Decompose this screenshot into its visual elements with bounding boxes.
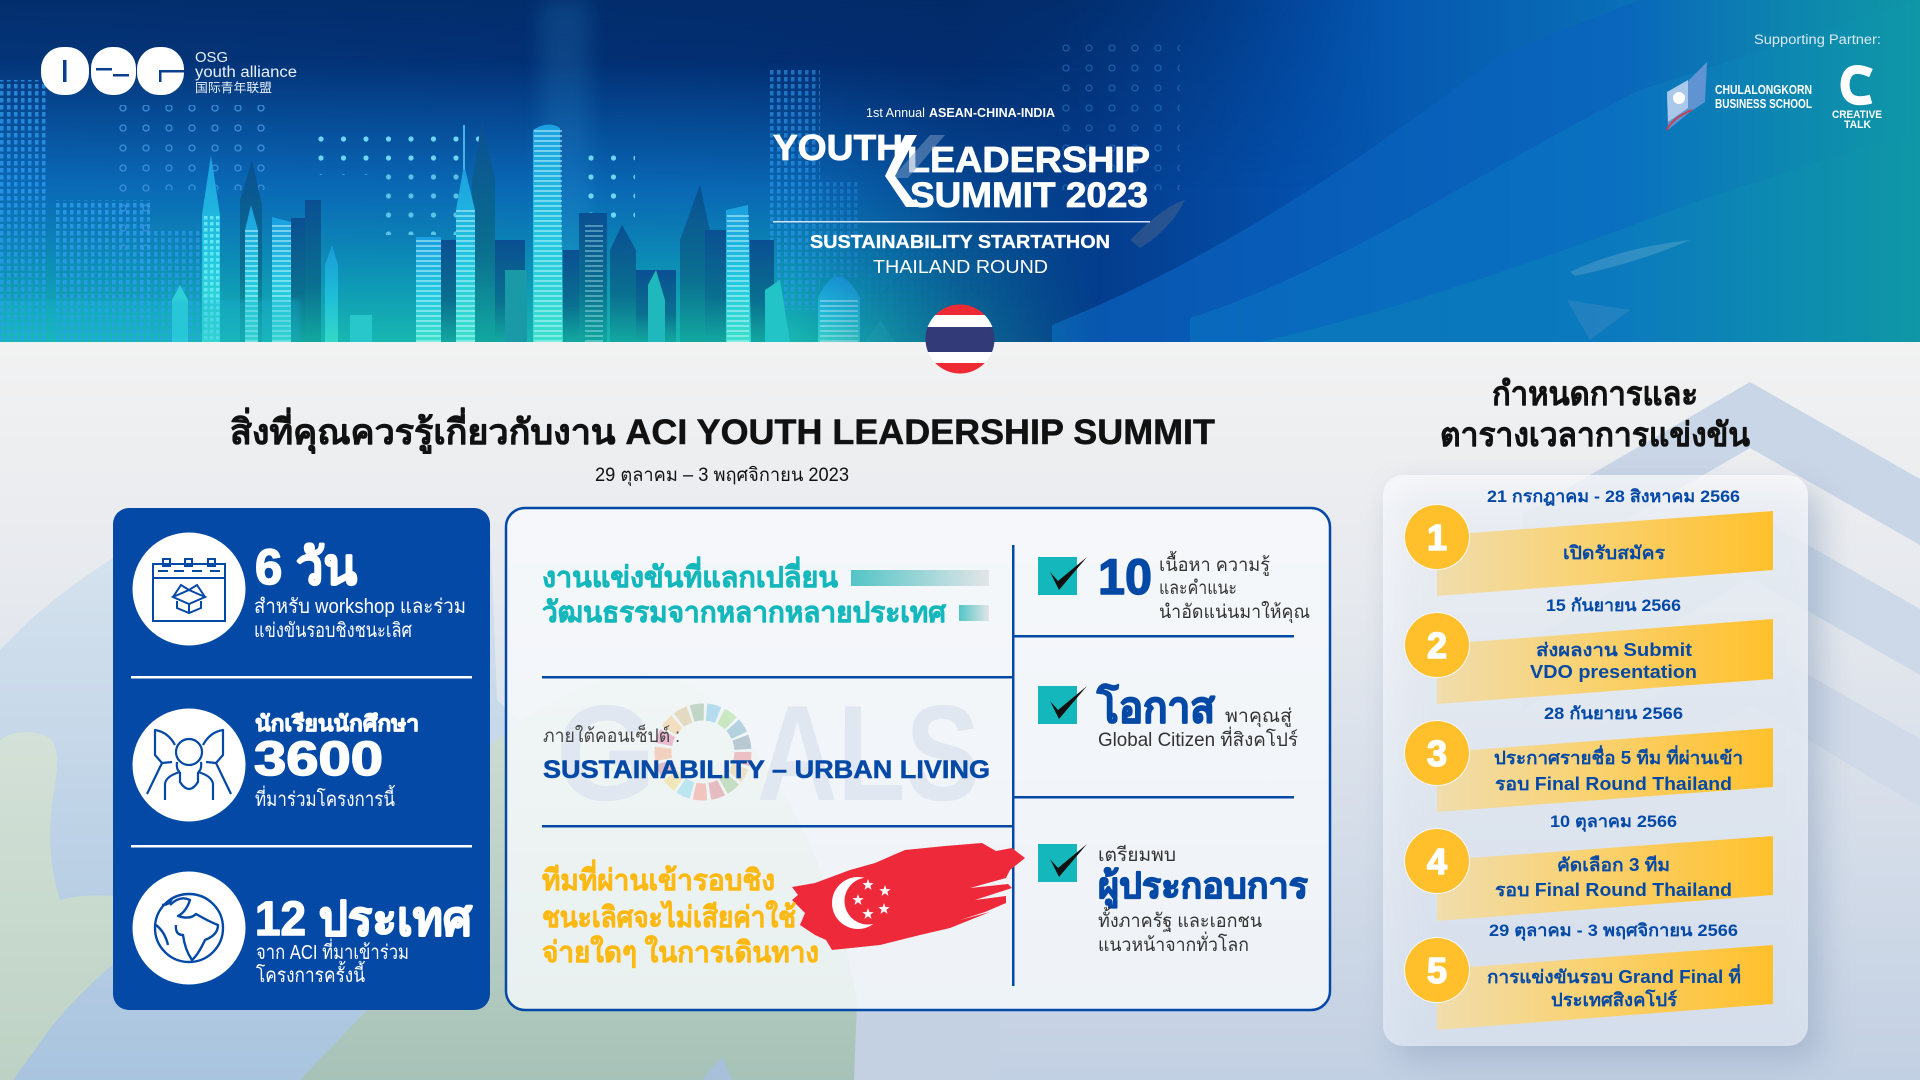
text: travel cost: ทีมที่ผ่านเข้ารอบชิง	[542, 859, 775, 897]
step 5: ประเทศสิงคโปร์	[1551, 989, 1677, 1010]
header banner	[0, 0, 1920, 342]
text: cultural exchange: วัฒนธรรมจากหลากหลายประเทศ	[542, 597, 947, 629]
step 4: 10 ตุลาคม 2566	[1550, 812, 1677, 832]
stat: 12 countries	[132, 872, 473, 987]
step 4	[1404, 812, 1773, 921]
step 5: การแข่งขันรอบ Grand Final ที่	[1487, 964, 1741, 987]
step 4: คัดเลือก 3 ทีม	[1557, 855, 1670, 875]
item: entrepreneurs: ผู้ประกอบการ	[1098, 865, 1309, 909]
logo: OSG youth alliance: youth alliance	[195, 64, 297, 81]
icon: Creative Talk C	[1845, 69, 1871, 101]
heading: schedule: กำหนดการและ	[1492, 375, 1698, 412]
partner logos: CHULALONGKORN	[1715, 83, 1812, 97]
partner logos: CREATIVE	[1832, 109, 1882, 121]
step 3: รอบ Final Round Thailand	[1495, 774, 1732, 794]
city skyline	[0, 0, 1100, 342]
step 4: 4	[1427, 841, 1447, 882]
text: concept	[543, 723, 990, 784]
stat: 3600 students: 3600	[254, 733, 383, 786]
stat: 3600 students: ที่มาร่วมโครงการนี้	[255, 785, 395, 811]
step 1: เปิดรับสมัคร	[1563, 543, 1665, 563]
item: entrepreneurs: ทั้งภาครัฐ และเอกชน	[1098, 907, 1262, 932]
item: entrepreneurs: แนวหน้าจากทั่วโลก	[1098, 931, 1249, 956]
heading: schedule: ตารางเวลาการแข่งขัน	[1440, 416, 1750, 453]
step 3: 3	[1427, 733, 1447, 774]
step 2	[1404, 596, 1773, 704]
logo: OSG youth alliance: OSG	[195, 49, 228, 66]
stat: 3600 students: นักเรียนนักศึกษา	[255, 711, 419, 736]
stat: 12 countries: โครงการครั้งนี้	[256, 961, 365, 987]
event title block: ASEAN-CHINA-INDIA	[929, 106, 1055, 120]
item: 10 topics	[1038, 549, 1310, 624]
step 2: ส่งผลงาน Submit	[1536, 640, 1692, 660]
step 5: 5	[1427, 950, 1447, 991]
stat: 6 days	[132, 532, 466, 646]
watermark: GOALS with SDG wheel: G	[556, 677, 656, 829]
item: 10 topics: นำอัดแน่นมาให้คุณ	[1159, 601, 1310, 624]
partner logos: BUSINESS SCHOOL	[1715, 97, 1812, 111]
main heading: 29 ตุลาคม – 3 พฤศจิกายน 2023	[595, 465, 849, 487]
logo: OSG youth alliance: 国际青年联盟	[195, 81, 272, 95]
text: travel cost: ชนะเลิศจะไม่เสียค่าใช้	[542, 900, 796, 934]
icon: Thai flag	[925, 304, 995, 375]
panel: highlights	[506, 508, 1330, 1010]
icon: OSG logo blobs	[41, 47, 184, 95]
text: cultural exchange	[542, 556, 989, 629]
main heading	[230, 407, 1215, 487]
step 3	[1404, 704, 1773, 812]
step 1: 21 กรกฎาคม - 28 สิงหาคม 2566	[1487, 487, 1740, 506]
item: opportunity: Global Citizen ที่สิงคโปร์	[1098, 726, 1298, 751]
icon: title chevron	[885, 135, 945, 207]
item: entrepreneurs: เตรียมพบ	[1098, 844, 1176, 866]
panel: key numbers	[113, 508, 490, 1010]
text: concept: SUSTAINABILITY – URBAN LIVING	[543, 756, 990, 784]
logo: OSG youth alliance	[41, 47, 297, 95]
icon: calendar with box	[153, 559, 225, 621]
icon: group of people	[147, 730, 231, 800]
step 4: รอบ Final Round Thailand	[1495, 880, 1732, 900]
icon: Singapore flag brush stroke	[792, 843, 1025, 950]
icon: globe	[155, 894, 223, 962]
event title block: THAILAND ROUND	[873, 257, 1048, 277]
item: 10 topics: 10	[1098, 549, 1152, 605]
step 3: ประกาศรายชื่อ 5 ทีม ที่ผ่านเข้า	[1494, 745, 1743, 768]
partner logos	[1667, 32, 1882, 131]
watermark: GOALS with SDG wheel	[556, 677, 980, 829]
step 2: VDO presentation	[1530, 662, 1697, 682]
watermark: GOALS with SDG wheel: ALS	[757, 677, 980, 829]
step 5: 29 ตุลาคม - 3 พฤศจิกายน 2566	[1489, 921, 1738, 941]
item: 10 topics: และคำแนะ	[1159, 578, 1237, 599]
step 1: 1	[1427, 517, 1447, 558]
text: cultural exchange: งานแข่งขันที่แลกเปลี่ยน	[542, 556, 838, 594]
stat: 12 countries: 12 ประเทศ	[255, 893, 473, 946]
panel: schedule timeline	[1383, 475, 1820, 1060]
step 3: 28 กันยายน 2566	[1544, 704, 1683, 723]
main heading: สิ่งที่คุณควรรู้เกี่ยวกับงาน ACI YOUTH LEADERSHIP SUMMIT	[230, 407, 1215, 454]
step 1	[1404, 487, 1773, 596]
text: concept: ภายใต้คอนเซ็ปต์ :	[543, 723, 680, 747]
event title block: YOUTH	[773, 127, 903, 168]
icon: Chulalongkorn shield	[1667, 62, 1707, 130]
stat: 6 days: สำหรับ workshop และร่วม	[254, 596, 466, 618]
step 5	[1404, 921, 1773, 1030]
item: opportunity: พาคุณสู่	[1225, 706, 1292, 728]
step 2: 15 กันยายน 2566	[1546, 596, 1681, 615]
text: travel cost	[542, 859, 819, 969]
heading: schedule	[1440, 375, 1750, 453]
event title block: SUMMIT 2023	[910, 176, 1148, 215]
stat: 3600 students	[132, 708, 419, 822]
event title block: 1st Annual	[866, 106, 925, 120]
event title block: LEADERSHIP	[907, 139, 1150, 180]
event title block: SUSTAINABILITY STARTATHON	[810, 232, 1110, 252]
item: 10 topics: เนื้อหา ความรู้	[1159, 551, 1270, 576]
partner logos: Supporting Partner:	[1754, 32, 1881, 47]
item: opportunity	[1038, 683, 1298, 751]
item: opportunity: โอกาส	[1096, 683, 1215, 731]
step 2: 2	[1427, 625, 1447, 666]
stat: 6 days: แข่งขันรอบชิงชนะเลิศ	[254, 620, 412, 642]
item: entrepreneurs	[1038, 844, 1309, 956]
event title block	[773, 106, 1150, 277]
partner logos: TALK	[1844, 119, 1871, 131]
page background	[0, 340, 1920, 1080]
stat: 12 countries: จาก ACI ที่มาเข้าร่วม	[256, 938, 409, 964]
stat: 6 days: 6 วัน	[255, 539, 357, 595]
text: travel cost: จ่ายใดๆ ในการเดินทาง	[542, 935, 819, 969]
